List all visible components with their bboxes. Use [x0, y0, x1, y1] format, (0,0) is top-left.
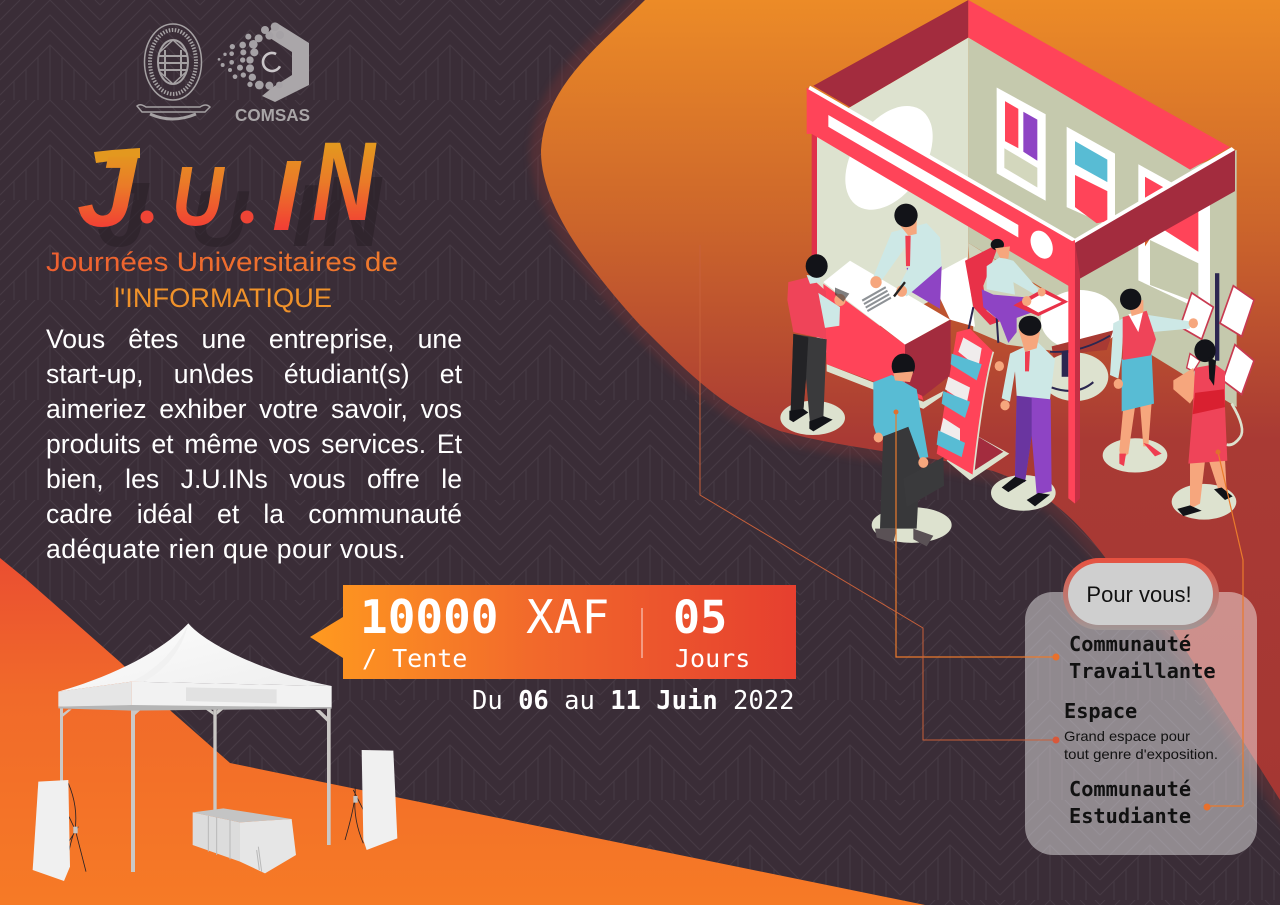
days label: Jours: [675, 644, 750, 673]
body text: cadre idéal et la communauté: [46, 499, 462, 529]
front fascia left: [807, 87, 1075, 286]
item: espace: Espace: [1064, 699, 1137, 723]
item: communauté estudiante: Estudiante: [1069, 804, 1191, 828]
man in purple trousers: [991, 316, 1056, 511]
woman in blue skirt: [1103, 289, 1198, 472]
left wall: [817, 37, 968, 357]
round table: [1041, 290, 1119, 401]
body text: produits et même vos services. Et: [46, 429, 462, 459]
title J.U.IN: J: [77, 135, 139, 247]
body text: bien, les J.U.INs vous offre le: [46, 464, 462, 494]
item: communauté estudiante: Communauté: [1069, 777, 1191, 801]
body text: start-up, un\des étudiant(s) et: [46, 359, 462, 389]
pill heading: [1063, 558, 1219, 630]
left post: [812, 132, 817, 275]
front fascia right: [1075, 150, 1235, 282]
title shadow: U: [190, 174, 250, 263]
logo: university seal: [137, 24, 210, 119]
title J.U.IN: [77, 120, 377, 252]
booth post: [1068, 240, 1080, 504]
poster 2: [1067, 127, 1115, 229]
brochure stand: [937, 329, 1009, 480]
title shadow: N: [322, 156, 383, 268]
connector lines: [700, 245, 1243, 810]
poster 3: [1138, 164, 1210, 314]
blob soft edge: [541, 0, 1280, 800]
seated woman: [965, 239, 1068, 343]
item: espace: tout genre d'exposition.: [1064, 746, 1218, 762]
poster 1: [997, 87, 1046, 201]
body text: adéquate rien que pour vous.: [46, 534, 406, 564]
right banner: [345, 750, 397, 850]
tent canopy: [58, 623, 332, 692]
title shadow: [97, 156, 383, 268]
roof back-left band: [813, 0, 968, 107]
title J.U.IN: I: [272, 140, 302, 252]
logo: COMSAS: [218, 22, 310, 125]
tent illustration: [33, 623, 397, 881]
per tent: / Tente: [362, 644, 467, 673]
wall logo shape: [828, 88, 950, 227]
body text: Vous êtes une entreprise, une: [46, 324, 462, 354]
panel: pour vous: [1025, 558, 1257, 855]
roof back-right band: [968, 0, 1230, 170]
subtitle: [46, 247, 398, 313]
COMSAS label: COMSAS: [235, 105, 310, 125]
booth floor patch: [968, 243, 1110, 352]
title J.U.IN: U: [172, 148, 225, 243]
orange gradient blob: [541, 0, 1280, 800]
subtitle: l'INFORMATIQUE: [114, 283, 332, 313]
booth illustration: [780, 0, 1254, 546]
pill heading: Pour vous!: [1086, 582, 1192, 607]
man in red vest: [780, 254, 849, 435]
item: communauté travaillante: Communauté: [1069, 632, 1191, 656]
bottom-left orange shape: [0, 558, 925, 905]
left banner: [33, 780, 86, 881]
days number: 05: [673, 591, 727, 644]
display stand: [1180, 273, 1254, 445]
counter: [823, 257, 975, 409]
item: espace: Grand espace pour: [1064, 728, 1190, 744]
body text: [46, 324, 462, 564]
dates: Du 06 au 11 Juin 2022: [472, 686, 794, 716]
item: communauté travaillante: Travaillante: [1069, 659, 1216, 683]
tent poles: [60, 706, 331, 872]
woman in red dress: [1172, 339, 1236, 520]
price ribbon: [310, 585, 796, 679]
item: espace: [1064, 699, 1218, 762]
title shadow: I: [292, 166, 318, 265]
back wall: [968, 37, 1237, 407]
clerk: [870, 204, 942, 309]
table: [193, 808, 296, 873]
price: 10000 XAF: [360, 590, 609, 644]
title shadow: J: [97, 164, 150, 266]
body text: aimeriez exhiber votre savoir, vos: [46, 394, 462, 424]
title J.U.IN: N: [312, 120, 377, 245]
man with briefcase: [872, 354, 952, 546]
subtitle: Journées Universitaires de: [46, 247, 398, 277]
